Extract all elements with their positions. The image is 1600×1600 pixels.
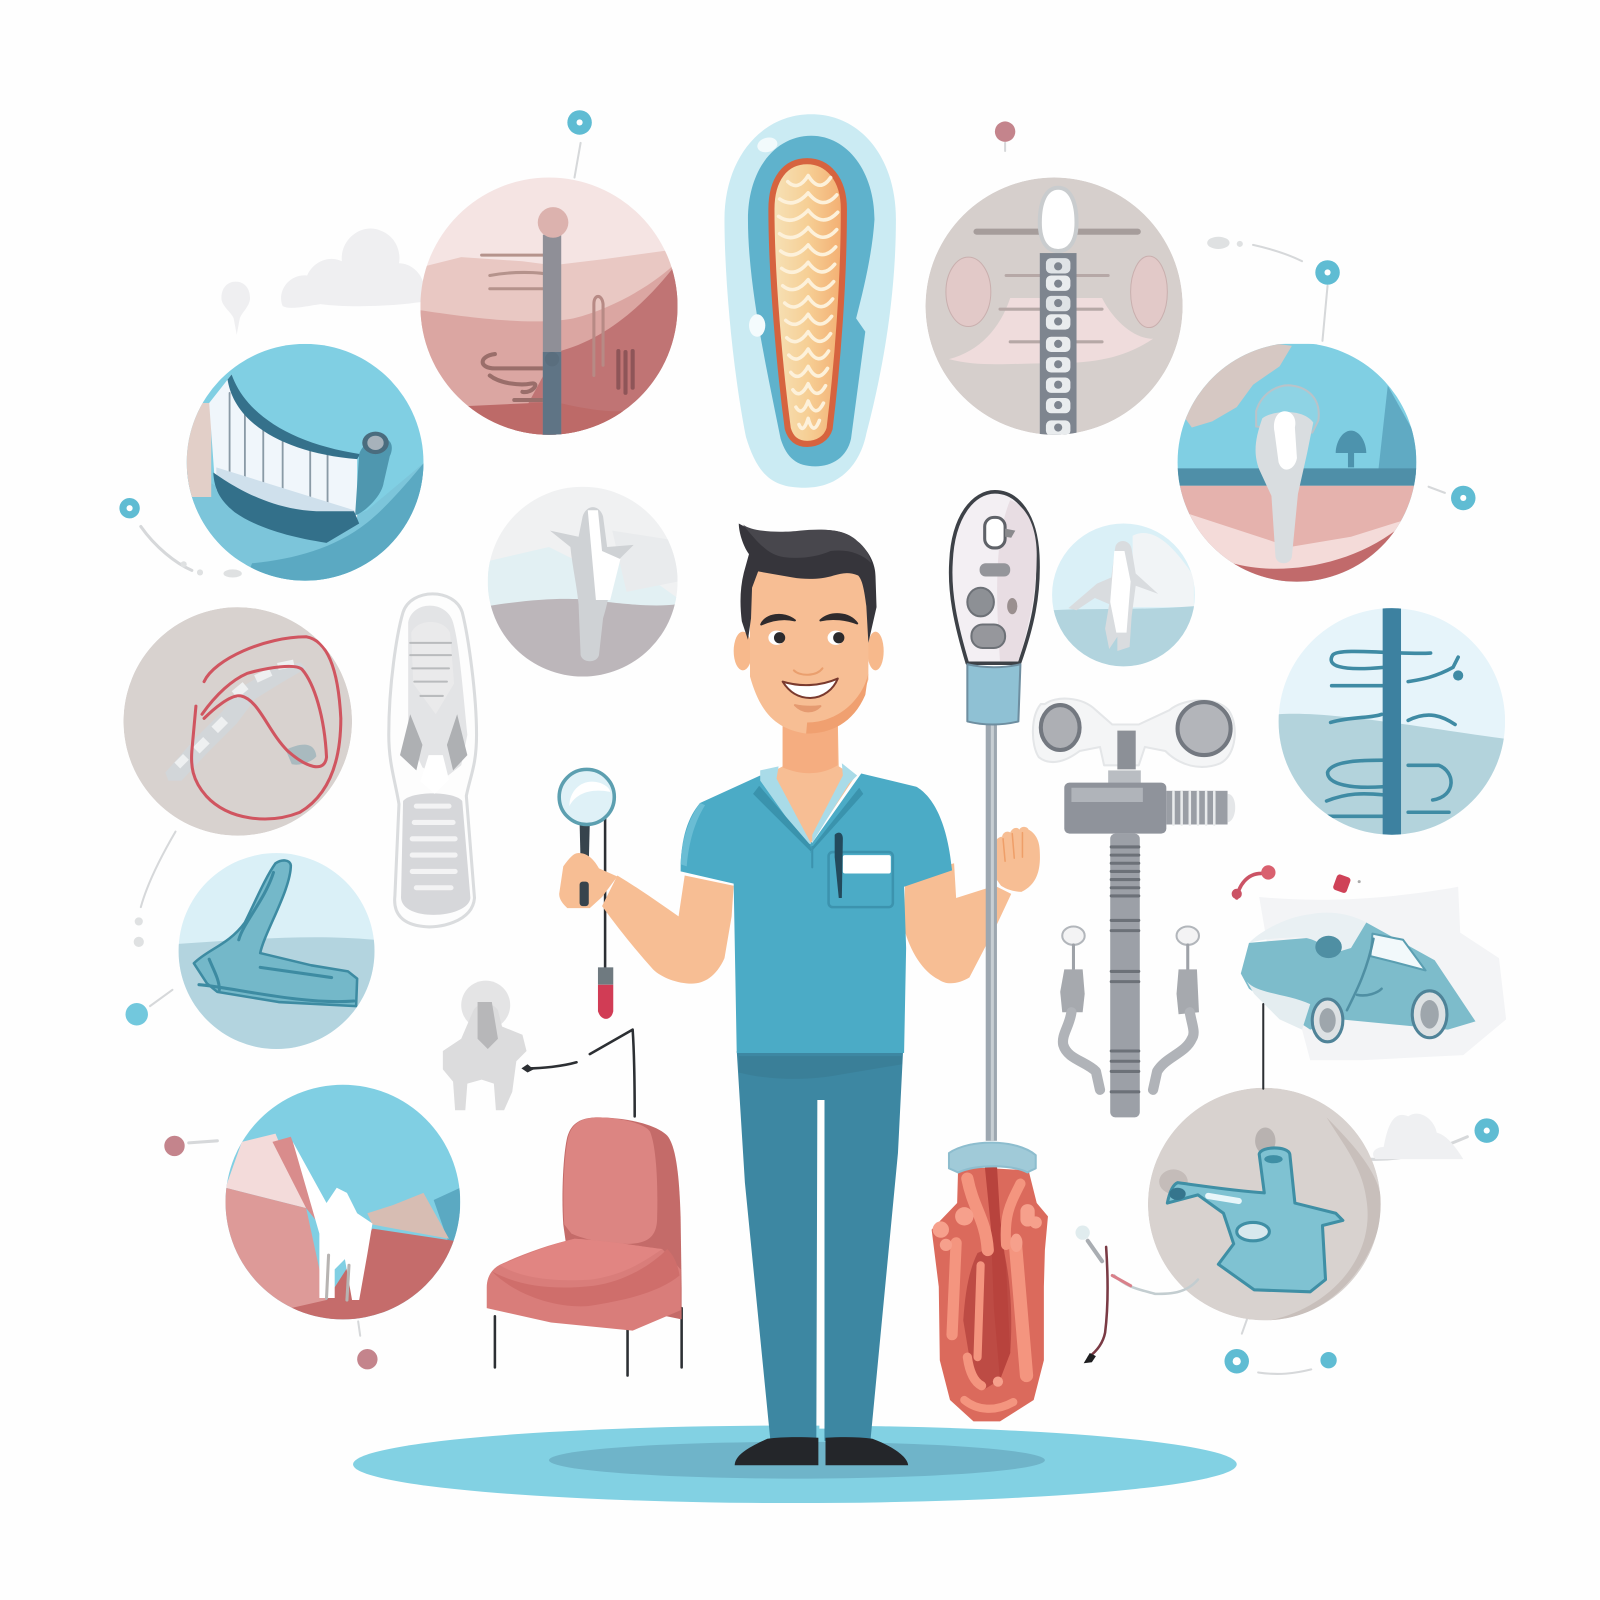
brows: [761, 614, 857, 624]
illustration: dentist surrounded by dental icons: [119, 110, 1506, 1503]
icon: red screwdriver handle: [932, 1143, 1048, 1421]
neck and chest: [763, 719, 855, 844]
ears: [734, 632, 752, 670]
icon: white gum bone model: [389, 594, 477, 927]
background clouds: [221, 228, 433, 335]
floor ellipse: [353, 1426, 1237, 1503]
icon: blue car with mist: [1241, 887, 1506, 1089]
panel: small pale blue circle: [1052, 523, 1195, 667]
icon: long probe tool: [951, 492, 1038, 1141]
legs: [737, 1051, 903, 1441]
collar: [760, 763, 857, 844]
panel: pink root circle: [420, 178, 678, 437]
connector dots and lines: [119, 110, 1499, 1374]
icon: right curved hook: [1153, 927, 1199, 1090]
icon: small dark scaler probe: [1076, 1226, 1198, 1363]
panel: grey red-wire circle: [123, 607, 352, 836]
panel: blue spring circle: [1279, 606, 1505, 841]
icon: magnifying mirror: [559, 769, 614, 1019]
icon: pink dental chair: [487, 1117, 682, 1376]
icon: left curved hook: [1060, 927, 1100, 1090]
icon: grey T-hammer instrument: [1033, 699, 1235, 1117]
torso and shirt: [681, 773, 952, 1053]
cloud behind bottom right circle: [1373, 1114, 1463, 1159]
panel: teal pink tooth circle: [1178, 344, 1416, 588]
panel: central tooth cross-section: [724, 114, 896, 488]
shoes: [735, 1437, 818, 1465]
nose: [794, 668, 822, 675]
face: [750, 567, 868, 734]
left arm and hand: [559, 853, 734, 984]
right arm and hand: [904, 827, 1040, 983]
icon: small grey molar figure with wire: [443, 981, 635, 1116]
pocket and badge: [829, 833, 893, 907]
smile: [783, 679, 838, 698]
panel: grey zipper circle: [926, 178, 1183, 437]
eyes: [768, 631, 785, 645]
panel: teal teeth circle: [186, 344, 424, 583]
panel: blue jaw circle: [179, 853, 374, 1052]
icon: small red implements: [1232, 865, 1361, 899]
hair: [739, 523, 877, 643]
panel: bottom right grey circle: [1148, 1088, 1382, 1321]
figure: dentist: [559, 523, 1040, 1465]
panel: bottom pink tooth circle: [226, 1084, 460, 1322]
panel: grey figure circle: [488, 487, 678, 682]
